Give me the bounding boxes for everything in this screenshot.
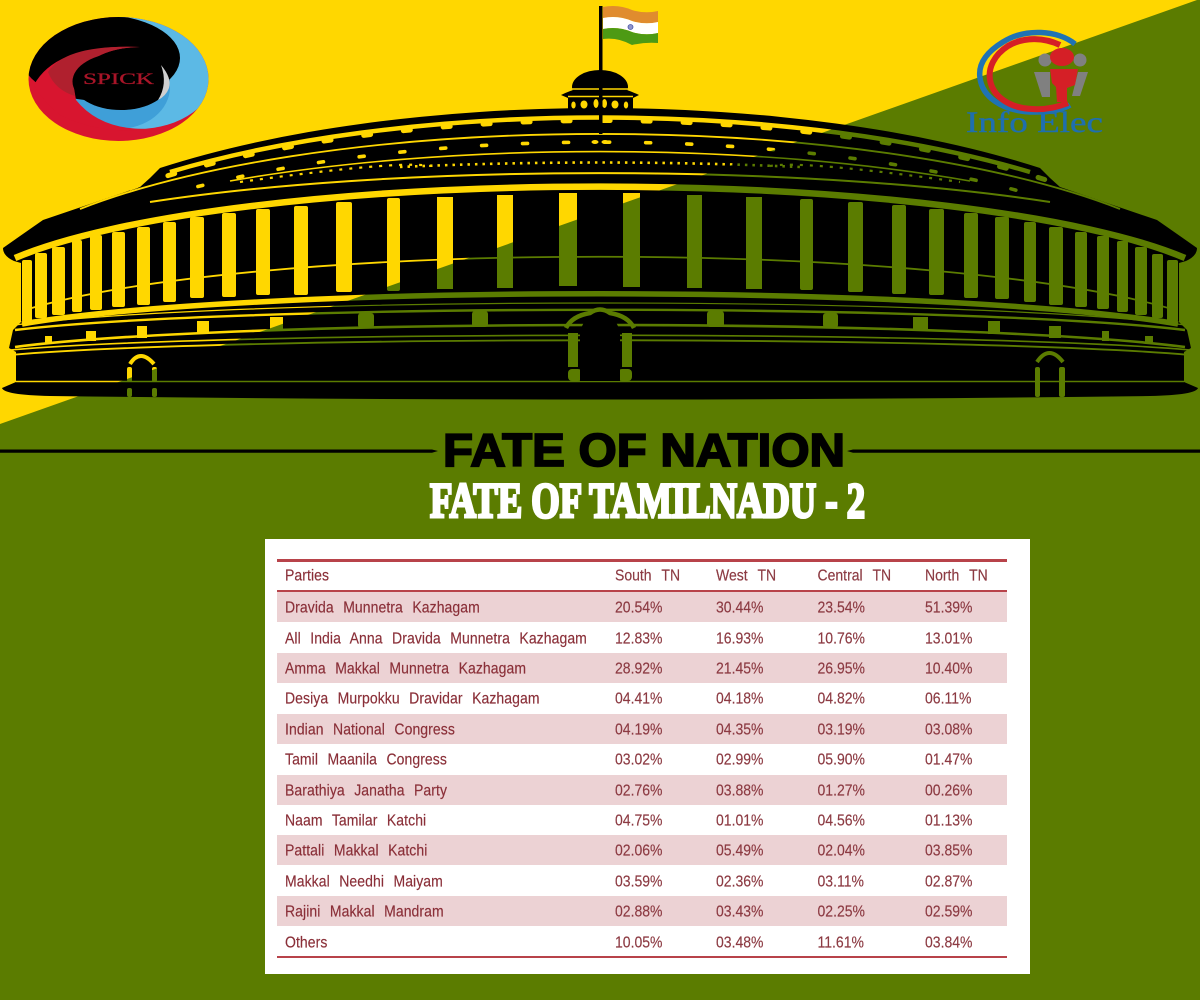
Indian flag [603, 6, 658, 45]
row: Amma Makkal Munnetra Kazhagam [277, 653, 1007, 683]
row: Amma Makkal Munnetra Kazhagam: 26.95% [818, 659, 865, 677]
row: Indian National Congress: Indian National Congress [285, 720, 455, 738]
row: Barathiya Janatha Party: 03.88% [716, 781, 763, 799]
row: Makkal Needhi Maiyam: 02.87% [925, 872, 972, 890]
row: Amma Makkal Munnetra Kazhagam: 21.45% [716, 659, 763, 677]
row: All India Anna Dravida Munnetra Kazhagam: 12.83% [615, 629, 662, 647]
row: Pattali Makkal Katchi: Pattali Makkal Katchi [285, 841, 427, 859]
row: All India Anna Dravida Munnetra Kazhagam: 13.01% [925, 629, 972, 647]
row: Pattali Makkal Katchi [277, 835, 1007, 865]
row: Others: 11.61% [818, 933, 864, 951]
table header: North TN [925, 566, 988, 584]
row: Desiya Murpokku Dravidar Kazhagam: 04.41% [615, 689, 662, 707]
row: All India Anna Dravida Munnetra Kazhagam: All India Anna Dravida Munnetra Kazhagam [285, 629, 587, 647]
row: Barathiya Janatha Party: 00.26% [925, 781, 972, 799]
parliament building silhouette [0, 4, 1200, 404]
row: Makkal Needhi Maiyam [285, 872, 972, 890]
row: Desiya Murpokku Dravidar Kazhagam [285, 689, 971, 708]
row: Naam Tamilar Katchi: 04.56% [818, 811, 865, 829]
table header: West TN [716, 566, 776, 584]
row: Desiya Murpokku Dravidar Kazhagam: 04.18% [716, 689, 763, 707]
table header: Parties [285, 566, 329, 584]
row: Indian National Congress: 03.19% [818, 720, 865, 738]
yellow diagonal background [0, 0, 1197, 424]
row: Tamil Maanila Congress: 01.47% [925, 750, 972, 768]
row: Amma Makkal Munnetra Kazhagam: 28.92% [615, 659, 662, 677]
table header: South TN [615, 566, 680, 584]
row: Pattali Makkal Katchi: 02.04% [818, 841, 865, 859]
row: Pattali Makkal Katchi: 02.06% [615, 841, 662, 859]
row: Dravida Munnetra Kazhagam: Dravida Munnetra Kazhagam [285, 598, 480, 616]
row: Dravida Munnetra Kazhagam: 30.44% [716, 598, 763, 616]
row: Rajini Makkal Mandram: 03.43% [716, 902, 763, 920]
table header: Central TN [818, 566, 891, 584]
row: Barathiya Janatha Party: 02.76% [615, 781, 662, 799]
row: Pattali Makkal Katchi: 05.49% [716, 841, 763, 859]
row: Barathiya Janatha Party: 01.27% [818, 781, 865, 799]
row: Naam Tamilar Katchi [285, 811, 972, 829]
title: Fate of Nation: FATE OF NATION [443, 424, 845, 476]
row: Makkal Needhi Maiyam: 03.59% [615, 872, 662, 890]
row: Amma Makkal Munnetra Kazhagam: Amma Makkal Munnetra Kazhagam [285, 659, 526, 677]
row: Tamil Maanila Congress: 02.99% [716, 750, 763, 768]
row: Amma Makkal Munnetra Kazhagam: 10.40% [925, 659, 972, 677]
row: Barathiya Janatha Party [277, 774, 1007, 805]
row: Rajini Makkal Mandram: 02.59% [925, 902, 972, 920]
row: Indian National Congress: 04.19% [615, 720, 662, 738]
row: Dravida Munnetra Kazhagam: 51.39% [925, 598, 972, 616]
row: Barathiya Janatha Party: Barathiya Janatha Party [285, 781, 447, 799]
row: Tamil Maanila Congress: Tamil Maanila Congress [285, 750, 447, 768]
background and parliament illustration [0, 0, 1200, 520]
Info Elec logo text: Info Elec [966, 106, 1103, 139]
row: Tamil Maanila Congress: 05.90% [818, 750, 865, 768]
row: All India Anna Dravida Munnetra Kazhagam [285, 629, 972, 648]
row: Others: Others [285, 933, 327, 951]
row: Rajini Makkal Mandram: Rajini Makkal Mandram [285, 902, 444, 920]
row: Desiya Murpokku Dravidar Kazhagam: Desiya Murpokku Dravidar Kazhagam [285, 689, 540, 707]
row: Pattali Makkal Katchi: 03.85% [925, 841, 972, 859]
row: Tamil Maanila Congress [285, 750, 972, 768]
row: Makkal Needhi Maiyam: 02.36% [716, 872, 763, 890]
row: Rajini Makkal Mandram: 02.88% [615, 902, 662, 920]
row: Others: 03.84% [925, 933, 972, 951]
row: Others [285, 933, 972, 951]
row: Naam Tamilar Katchi: 01.13% [925, 811, 972, 829]
row: Makkal Needhi Maiyam: Makkal Needhi Maiyam [285, 872, 443, 890]
row: Indian National Congress [277, 714, 1007, 744]
row: All India Anna Dravida Munnetra Kazhagam: 16.93% [716, 629, 763, 647]
row: Rajini Makkal Mandram: 02.25% [818, 902, 865, 920]
row: Rajini Makkal Mandram [277, 896, 1007, 926]
row: Dravida Munnetra Kazhagam: 23.54% [818, 598, 865, 616]
table header [285, 566, 988, 584]
Info Elec logo [980, 32, 1088, 112]
row: Naam Tamilar Katchi: Naam Tamilar Katchi [285, 811, 426, 829]
row: Makkal Needhi Maiyam: 03.11% [818, 872, 864, 890]
row: Indian National Congress: 03.08% [925, 720, 972, 738]
row: Naam Tamilar Katchi: 01.01% [716, 811, 763, 829]
SPICK logo text: SPICK [83, 71, 155, 88]
row: Others: 03.48% [716, 933, 763, 951]
row: Indian National Congress: 04.35% [716, 720, 763, 738]
row: Others: 10.05% [615, 933, 662, 951]
table panel [265, 539, 1030, 974]
row: All India Anna Dravida Munnetra Kazhagam: 10.76% [818, 629, 865, 647]
row: Naam Tamilar Katchi: 04.75% [615, 811, 662, 829]
row: Dravida Munnetra Kazhagam: 20.54% [615, 598, 662, 616]
subtitle: Fate of Tamilnadu 2: FATE OF TAMILNADU - 2 [430, 472, 865, 528]
SPICK logo [28, 17, 208, 141]
row: Dravida Munnetra Kazhagam [277, 592, 1007, 622]
row: Desiya Murpokku Dravidar Kazhagam: 04.82% [818, 689, 865, 707]
heading rule left [0, 450, 438, 453]
row: Desiya Murpokku Dravidar Kazhagam: 06.11% [925, 689, 971, 707]
heading rule right [847, 450, 1200, 453]
row: Tamil Maanila Congress: 03.02% [615, 750, 662, 768]
